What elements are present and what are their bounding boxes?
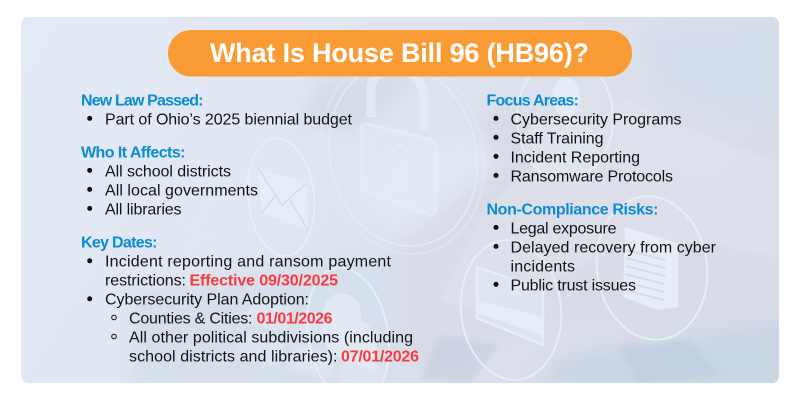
section: non-compliance risks: Delayed recovery from cyber [510, 239, 717, 256]
section: key dates: school districts and libraries): [129, 349, 338, 366]
section: key dates: 01/01/2026 [256, 311, 333, 328]
section: who it affects: All local governments [105, 182, 258, 199]
section: key dates: Incident reporting and ransom payment [105, 254, 392, 271]
section: non-compliance risks [486, 201, 717, 294]
title pill [168, 30, 632, 76]
section: who it affects: Who It Affects: [81, 144, 186, 161]
section: new law passed: New Law Passed: [81, 92, 204, 109]
icon: envelope [258, 168, 314, 256]
icon: credit card [460, 239, 562, 381]
section: non-compliance risks: Public trust issues [510, 277, 636, 294]
hand outline [440, 98, 790, 306]
section: key dates: Effective 09/30/2025 [190, 273, 338, 290]
decorative small ring [172, 174, 208, 226]
section: new law passed [81, 92, 353, 128]
section: non-compliance risks: Legal exposure [510, 220, 617, 237]
section: key dates: 07/01/2026 [341, 349, 419, 366]
section: focus areas: Cybersecurity Programs [510, 111, 682, 128]
section: focus areas [486, 92, 682, 185]
section: who it affects [81, 144, 258, 218]
section: key dates: Key Dates: [81, 235, 158, 252]
section: key dates: Counties & Cities: [129, 311, 252, 328]
section: new law passed: Part of Ohio’s 2025 biennial budget [105, 111, 353, 128]
section: key dates [81, 235, 419, 366]
icon: person [516, 76, 614, 181]
section: focus areas: Ransomware Protocols [510, 168, 673, 185]
icon: cloud [306, 266, 390, 383]
section: non-compliance risks: Non-Compliance Risks: [486, 201, 658, 218]
title text: What Is House Bill 96 (HB96)? [210, 38, 589, 68]
icon: padlock [322, 76, 484, 254]
section: who it affects: All school districts [105, 163, 231, 180]
icon: documents [596, 196, 708, 341]
section: non-compliance risks: incidents [510, 258, 575, 275]
section: key dates: All other political subdivisions (including [129, 330, 413, 347]
keyboard keys [237, 297, 395, 392]
section: focus areas: Staff Training [510, 130, 604, 147]
section: who it affects: All libraries [105, 201, 182, 218]
section: key dates: restrictions: [105, 273, 186, 290]
section: key dates: Cybersecurity Plan Adoption: [105, 292, 309, 309]
section: focus areas: Focus Areas: [486, 92, 579, 109]
section: focus areas: Incident Reporting [510, 149, 640, 166]
